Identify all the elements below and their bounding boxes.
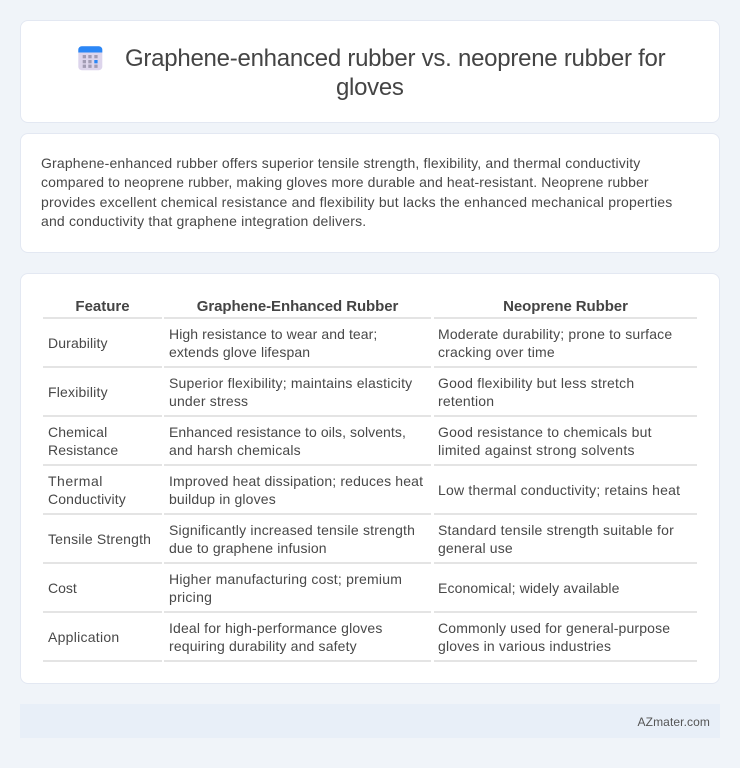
column header: feature: Feature xyxy=(75,298,130,315)
column header: graphene: Graphene-Enhanced Rubber xyxy=(197,298,398,315)
icon: calendar xyxy=(78,46,102,70)
row: flexibility: Superior flexibility; maintains elasticity xyxy=(169,375,412,391)
table panel xyxy=(20,273,720,684)
row: durability: extends glove lifespan xyxy=(169,344,310,360)
row: durability: High resistance to wear and tear; xyxy=(169,326,377,342)
row: durability: Moderate durability; prone to surface xyxy=(438,326,672,342)
row: chemical resistance: Enhanced resistance to oils, solvents, xyxy=(169,424,406,440)
title xyxy=(125,45,666,101)
row: chemical resistance: Resistance xyxy=(48,442,118,458)
row: tensile strength: Standard tensile strength suitable for xyxy=(438,522,674,538)
intro text: and conductivity that graphene integration delivers. xyxy=(41,213,366,229)
row: thermal conductivity: buildup in gloves xyxy=(169,491,276,507)
row: cost: pricing xyxy=(169,589,212,605)
title: Graphene-enhanced rubber vs. neoprene rubber for xyxy=(125,45,665,72)
row: tensile strength: Significantly increased tensile strength xyxy=(169,522,415,538)
row: tensile strength xyxy=(48,522,674,556)
row: thermal conductivity: Improved heat dissipation; reduces heat xyxy=(169,473,423,489)
footer text: AZmater.com xyxy=(638,715,710,729)
title: gloves xyxy=(336,74,404,101)
row: thermal conductivity xyxy=(48,473,680,507)
row: chemical resistance: Good resistance to chemicals but xyxy=(438,424,652,440)
row: flexibility: Good flexibility but less stretch xyxy=(438,375,634,391)
intro text: Graphene-enhanced rubber offers superior tensile strength, flexibility, and thermal conductivity xyxy=(41,154,640,170)
row: cost xyxy=(48,571,620,605)
intro text: provides excellent chemical resistance and flexibility but lacks the enhanced mechanical properties xyxy=(41,194,672,210)
row: durability: Durability xyxy=(48,335,108,351)
footer bar xyxy=(20,704,720,738)
row: thermal conductivity: Thermal xyxy=(48,473,103,489)
row: tensile strength: Tensile Strength xyxy=(48,531,151,547)
row: application xyxy=(48,620,670,654)
row: cost: Cost xyxy=(48,580,77,596)
row: chemical resistance xyxy=(48,424,652,458)
header panel xyxy=(20,20,720,123)
intro text xyxy=(41,154,672,229)
intro panel xyxy=(20,133,720,253)
row: durability xyxy=(48,326,672,360)
row: chemical resistance: Chemical xyxy=(48,424,107,440)
row: application: requiring durability and safety xyxy=(169,638,357,654)
row: tensile strength: due to graphene infusion xyxy=(169,540,327,556)
intro text: compared to neoprene rubber, making gloves more durable and heat-resistant. Neoprene rubber xyxy=(41,174,649,190)
row: flexibility: under stress xyxy=(169,393,248,409)
row: flexibility: retention xyxy=(438,393,494,409)
row: flexibility xyxy=(48,375,634,409)
row: thermal conductivity: Low thermal conductivity; retains heat xyxy=(438,482,680,498)
row: durability: cracking over time xyxy=(438,344,555,360)
row: application: Ideal for high-performance gloves xyxy=(169,620,383,636)
row: chemical resistance: and harsh chemicals xyxy=(169,442,301,458)
row: application: Application xyxy=(48,629,119,645)
row: tensile strength: general use xyxy=(438,540,513,556)
row: application: gloves in various industries xyxy=(438,638,611,654)
row: cost: Higher manufacturing cost; premium xyxy=(169,571,402,587)
row: thermal conductivity: Conductivity xyxy=(48,491,126,507)
row: cost: Economical; widely available xyxy=(438,580,620,596)
column header: neoprene: Neoprene Rubber xyxy=(503,298,628,315)
row: application: Commonly used for general-purpose xyxy=(438,620,670,636)
row: flexibility: Flexibility xyxy=(48,384,108,400)
row: chemical resistance: limited against strong solvents xyxy=(438,442,635,458)
